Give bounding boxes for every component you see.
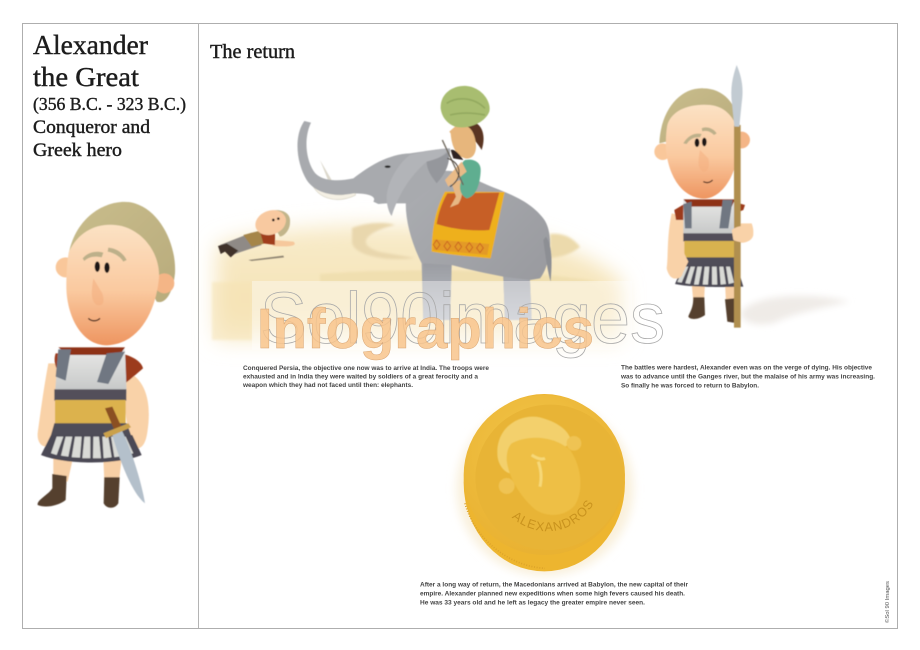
heading: the return: The return <box>210 41 295 63</box>
tail <box>543 237 552 282</box>
blanket <box>432 192 505 258</box>
spear <box>734 125 741 328</box>
text block: Babylon: empire. Alexander planned new expeditions when some high fevers caused his death. <box>420 590 685 598</box>
watermark: Infographics: Infographics <box>257 297 594 361</box>
text block: Babylon: After a long way of return, the Macedonians arrived at Babylon, the new capital of their <box>420 582 689 588</box>
text block: battles <box>620 364 875 390</box>
ground: desert sand <box>212 223 622 342</box>
shadow <box>740 296 850 325</box>
title: (356 B.C. - 323 B.C.) <box>33 94 186 115</box>
eye <box>385 165 391 168</box>
fallen soldier <box>218 206 295 261</box>
text block: Persia: Conquered Persia, the objective one now was to arrive at India. The troops were <box>243 365 489 372</box>
text block: Babylon <box>420 582 689 606</box>
credit: ©Sol 90 Images <box>884 581 891 623</box>
ear <box>387 149 448 216</box>
illustration: gold coin <box>454 394 636 579</box>
illustration: elephant and rider <box>218 86 552 320</box>
text block: Persia <box>242 365 489 389</box>
title: the Great <box>33 62 140 92</box>
watermark band <box>252 281 632 350</box>
illustration: Alexander with spear <box>654 65 850 328</box>
tusks <box>309 172 356 200</box>
text block: battles: was to advance until the Ganges river, but the malaise of his army was increasing. <box>620 374 875 380</box>
illustration: gold coin: ALEXANDROS <box>512 500 592 532</box>
rider <box>441 86 490 207</box>
body <box>406 171 550 320</box>
text block: Persia: weapon which they had not faced until then: elephants. <box>242 382 413 389</box>
title: Alexander <box>33 30 148 60</box>
trunk and head <box>297 121 450 204</box>
title: Greek hero <box>33 141 122 161</box>
title <box>33 30 186 161</box>
title: Conqueror and <box>33 118 151 138</box>
illustration: Alexander with sword <box>38 202 175 508</box>
text block: battles: So finally he was forced to return to Babylon. <box>621 382 759 390</box>
text block: Persia: exhausted and in India they were waited by soldiers of a great ferocity and a <box>243 374 478 380</box>
watermark: Sol90images: Sol90images <box>260 279 665 359</box>
text block: battles: The battles were hardest, Alexander even was on the verge of dying. His objective <box>621 364 872 372</box>
text block: Babylon: He was 33 years old and he left as legacy the greater empire never seen. <box>420 600 645 606</box>
